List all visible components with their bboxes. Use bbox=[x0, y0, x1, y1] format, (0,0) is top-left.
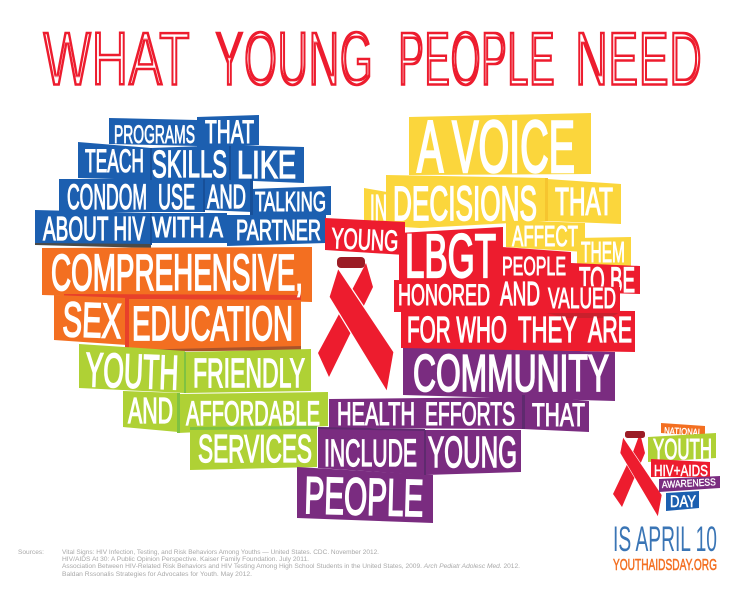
panel: green youth friendly services bbox=[79, 344, 328, 471]
panel: yellow a voice phrase bbox=[364, 107, 631, 269]
sources list: Baldan Rssonalis Strategies for Advocates for Youth. May 2012. bbox=[62, 572, 252, 578]
panel: green youth friendly services: AFFORDABLE bbox=[186, 395, 320, 433]
panel: purple community health efforts bbox=[297, 345, 615, 528]
panel: red young lbgt phrase: TO BE bbox=[579, 261, 635, 300]
panel: green youth friendly services: FRIENDLY bbox=[193, 350, 305, 396]
panel: blue programs phrase: CONDOM bbox=[67, 178, 147, 217]
panel: blue programs phrase: ABOUT HIV bbox=[43, 210, 145, 247]
panel: yellow a voice phrase: AFFECT bbox=[512, 221, 578, 253]
panel: blue programs phrase: WITH A bbox=[152, 212, 223, 244]
panel: red young lbgt phrase: AND bbox=[500, 275, 540, 312]
panel: red young lbgt phrase: LBGT bbox=[405, 222, 496, 290]
panel: green youth friendly services: AND bbox=[128, 390, 173, 431]
panel: red young lbgt phrase: FOR WHO bbox=[407, 309, 507, 350]
title: WHAT bbox=[43, 17, 190, 102]
panel: yellow a voice phrase: A VOICE bbox=[417, 107, 575, 188]
panel: blue programs phrase: USE bbox=[158, 178, 195, 217]
logo tag: day: DAY bbox=[670, 492, 696, 511]
panel: blue programs phrase: PROGRAMS bbox=[114, 121, 195, 149]
panel: orange comprehensive sex education: COMPREHENSIVE, bbox=[51, 244, 303, 301]
title: PEOPLE bbox=[398, 17, 555, 102]
panel: blue programs phrase: AND bbox=[207, 178, 246, 215]
title: YOUNG bbox=[215, 17, 373, 102]
panel: purple community health efforts: YOUNG bbox=[428, 428, 517, 477]
panel: red young lbgt phrase: YOUNG bbox=[331, 223, 399, 258]
panel: purple community health efforts: PEOPLE bbox=[304, 467, 424, 528]
panel: red young lbgt phrase: PEOPLE bbox=[502, 251, 566, 281]
panel: yellow a voice phrase: THAT bbox=[555, 181, 613, 224]
logo tag: hiv aids: HIV+AIDS bbox=[654, 463, 708, 480]
panel: yellow a voice phrase: THEM bbox=[581, 237, 625, 269]
panel: red young lbgt phrase: ARE bbox=[588, 309, 632, 350]
panel: purple community health efforts: HEALTH bbox=[337, 396, 415, 432]
panel: orange comprehensive sex education bbox=[42, 244, 312, 352]
panel: red young lbgt phrase: VALUED bbox=[548, 283, 616, 315]
logo tag: awareness: AWARENESS bbox=[662, 477, 716, 491]
panel: green youth friendly services: SERVICES bbox=[198, 428, 312, 471]
panel: blue programs phrase: PARTNER bbox=[236, 215, 321, 247]
panel: purple community health efforts: THAT bbox=[532, 397, 585, 433]
panel: blue programs phrase: TEACH bbox=[85, 143, 144, 179]
panel: blue programs phrase: LIKE bbox=[237, 144, 296, 187]
logo: national youth hiv aids awareness day bbox=[613, 423, 720, 517]
panel: red young lbgt phrase: THEY bbox=[518, 309, 577, 350]
panel: red young lbgt phrase bbox=[325, 218, 640, 352]
panel: purple community health efforts: COMMUNITY bbox=[413, 345, 609, 403]
panel: yellow a voice phrase: DECISIONS bbox=[393, 178, 537, 231]
panel: red young lbgt phrase: HONORED bbox=[398, 279, 490, 312]
panel: purple community health efforts: INCLUDE bbox=[324, 433, 417, 475]
sources label: Sources: bbox=[18, 550, 44, 556]
title bbox=[43, 17, 702, 102]
panel: purple community health efforts: EFFORTS bbox=[425, 396, 515, 432]
panel: blue programs phrase: SKILLS bbox=[152, 144, 227, 186]
icon: logo ribbon bbox=[613, 431, 662, 517]
panel: orange comprehensive sex education: SEX bbox=[62, 293, 122, 349]
sources list bbox=[62, 550, 520, 578]
sources list: HIV/AIDS At 30: A Public Opinion Perspective. Kaiser Family Foundation. July 2011. bbox=[62, 557, 309, 563]
panel: blue programs phrase: TALKING bbox=[255, 186, 326, 217]
sources list: Vital Signs: HIV Infection, Testing, and Risk Behaviors Among Youths — United States. CDC. November 2012. bbox=[62, 550, 379, 556]
sources list: Association Between HIV-Related Risk Behaviors and HIV Testing Among High School Students in the United States, 2009. Arch Pediatr Adolesc Med. 2012. bbox=[62, 564, 520, 570]
panel: yellow a voice phrase: IN bbox=[370, 187, 387, 228]
panel: green youth friendly services: YOUTH bbox=[85, 344, 179, 400]
panel: blue programs phrase bbox=[35, 114, 331, 248]
icon: red ribbon bbox=[318, 257, 394, 392]
logo tag: national: NATIONAL bbox=[664, 426, 703, 439]
panel: orange comprehensive sex education: EDUCATION bbox=[132, 298, 293, 351]
panel: blue programs phrase: THAT bbox=[205, 114, 254, 150]
